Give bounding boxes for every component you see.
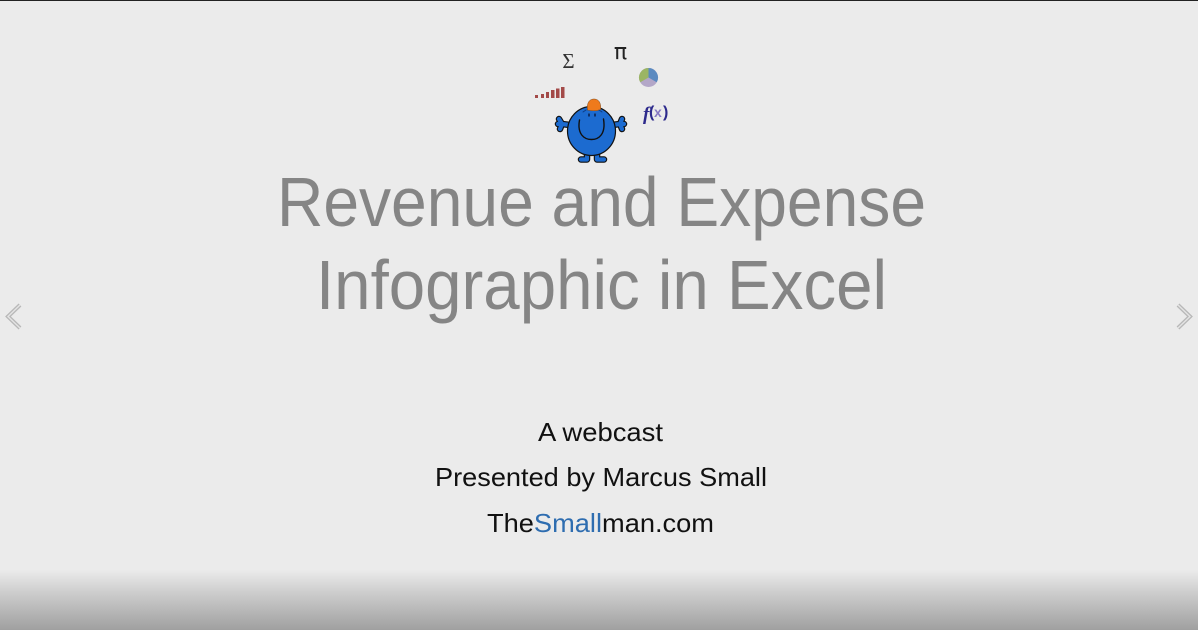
body xyxy=(568,106,616,156)
hat xyxy=(587,99,601,111)
icon: sigma: Σ xyxy=(562,49,575,73)
smile xyxy=(579,119,604,140)
icon: function label: ) xyxy=(663,104,668,121)
icon: pi: π xyxy=(614,40,627,65)
icon: function label: ( xyxy=(649,104,655,121)
eyes xyxy=(588,113,590,117)
title: Revenue and Expense xyxy=(277,163,926,241)
icon: function label: f xyxy=(643,104,651,125)
title: Infographic in Excel xyxy=(316,246,887,324)
brows xyxy=(583,110,602,112)
arms and feet fill xyxy=(558,119,624,160)
icon: bar chart xyxy=(535,87,564,98)
text block: presenter details: TheSmallman.com xyxy=(487,508,714,538)
bottom gradient band xyxy=(0,570,1198,630)
arrow: next xyxy=(1178,305,1190,328)
text block: presenter details: Presented by Marcus Small xyxy=(435,462,767,492)
text block: presenter details xyxy=(435,417,767,538)
icon: function label: x xyxy=(654,104,662,120)
text block: presenter details: A webcast xyxy=(538,417,664,447)
icon: pie chart xyxy=(639,68,658,87)
arrow: previous xyxy=(8,305,20,328)
icon: blue character xyxy=(558,99,624,160)
arms and feet outline xyxy=(558,119,624,160)
title xyxy=(277,163,926,324)
icon: function label xyxy=(643,104,668,125)
